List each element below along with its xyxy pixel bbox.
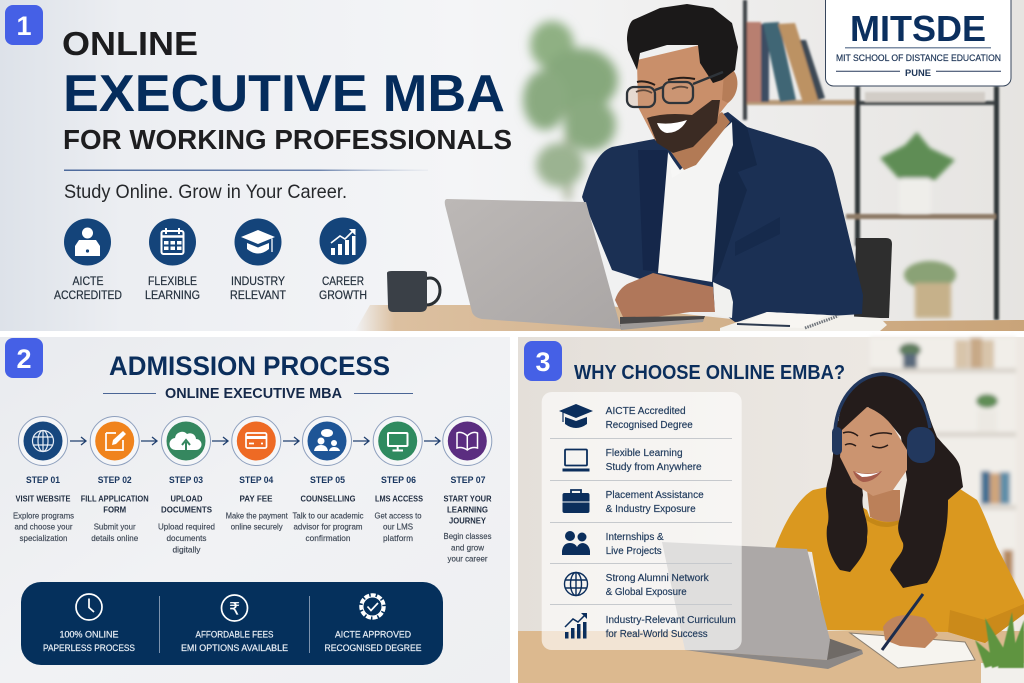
step 05: advisor for program — [294, 522, 363, 532]
face — [637, 45, 737, 153]
step 03: digitally — [172, 544, 201, 554]
step 05 — [292, 416, 364, 543]
step 06: Get access to — [374, 510, 422, 520]
feature: flexible learning: LEARNING — [145, 290, 200, 302]
step 02: STEP 02 — [98, 475, 132, 486]
benefit: accredited degree — [559, 404, 693, 431]
step 03: DOCUMENTS — [161, 504, 212, 514]
logo card — [826, 0, 1011, 86]
logo location: PUNE — [905, 68, 931, 79]
step 01: STEP 01 — [26, 475, 61, 486]
desk — [355, 305, 1024, 331]
tagline: Study Online. Grow in Your Career. — [64, 181, 347, 203]
benefit: flexible learning — [562, 448, 702, 473]
highlights bar — [21, 582, 443, 665]
chair — [854, 238, 892, 318]
hair — [627, 4, 738, 83]
benefit: curriculum — [565, 613, 736, 640]
benefit: internships — [562, 531, 664, 557]
panel: admission process — [0, 337, 510, 683]
step 07: JOURNEY — [449, 516, 486, 526]
benefit: curriculum: Industry-Relevant Curriculum — [606, 615, 736, 626]
feature: flexible learning: FLEXIBLE — [148, 276, 197, 288]
panel: why choose online emba — [518, 337, 1024, 683]
shirt — [658, 122, 733, 282]
benefit: curriculum: for Real-World Success — [606, 629, 708, 640]
step 04 — [226, 416, 288, 532]
logo wordmark: MITSDE — [850, 8, 986, 49]
benefit: alumni network: Strong Alumni Network — [606, 573, 709, 584]
step 07: Begin classes — [444, 531, 492, 541]
step 07: START YOUR — [444, 493, 492, 503]
feature: AICTE accredited — [54, 218, 122, 302]
hand — [615, 273, 715, 317]
step 01: and choose your — [14, 522, 73, 532]
shelf plants — [880, 132, 956, 318]
feature: industry relevant: RELEVANT — [230, 290, 286, 302]
left hair — [826, 420, 868, 572]
benefit: accredited degree: AICTE Accredited — [606, 406, 686, 417]
right hair — [885, 378, 963, 588]
feature: career growth — [319, 218, 367, 302]
benefit: placement assistance — [562, 490, 704, 515]
benefit: accredited degree: Recognised Degree — [606, 420, 693, 431]
step 07: LEARNING — [447, 504, 488, 514]
blurred plant — [523, 21, 618, 200]
step 02: details online — [91, 533, 139, 543]
step 03: STEP 03 — [169, 475, 203, 486]
step 03 — [158, 416, 215, 554]
beard — [647, 100, 720, 153]
step 01: VISIT WEBSITE — [16, 493, 71, 503]
badge: number 3 — [524, 341, 562, 381]
feature: career growth: CAREER — [322, 276, 364, 288]
step 07: your career — [448, 554, 488, 564]
title: online: ONLINE — [62, 25, 198, 62]
feature: career growth: GROWTH — [319, 290, 367, 302]
step 05: STEP 05 — [310, 475, 346, 486]
highlight: affordable fees — [181, 595, 288, 653]
highlight: aicte approved: RECOGNISED DEGREE — [324, 643, 422, 653]
feature: industry relevant — [230, 218, 286, 302]
benefit: internships: Live Projects — [606, 546, 662, 557]
jacket — [582, 112, 863, 322]
step 05: Talk to our academic — [292, 510, 364, 520]
title: executive mba: EXECUTIVE MBA — [63, 65, 505, 123]
highlight: 100% online: 100% ONLINE — [60, 630, 118, 640]
laptop — [445, 199, 705, 330]
step 07: and grow — [451, 542, 485, 552]
badge: number 3: 3 — [535, 347, 551, 377]
step 04: PAY FEE — [240, 493, 273, 503]
step 06: our LMS — [383, 522, 413, 532]
highlight: affordable fees: EMI OPTIONS AVAILABLE — [181, 643, 288, 653]
headphone band — [835, 374, 930, 430]
feature: industry relevant: INDUSTRY — [231, 276, 285, 288]
logo subtitle: MIT SCHOOL OF DISTANCE EDUCATION — [836, 53, 1001, 64]
office shelves background — [743, 0, 999, 320]
step 05: COUNSELLING — [300, 493, 356, 503]
step 01: specialization — [20, 533, 68, 543]
step 04: STEP 04 — [239, 475, 274, 486]
step 04: online securely — [231, 522, 284, 532]
step 07: STEP 07 — [450, 475, 486, 486]
process arrows — [70, 437, 440, 445]
highlight: 100% online: PAPERLESS PROCESS — [43, 643, 135, 653]
smile — [657, 120, 687, 133]
benefit: internships: Internships & — [606, 532, 664, 543]
highlight: 100% online — [43, 594, 135, 653]
cuff — [713, 282, 733, 318]
sweater — [775, 487, 1024, 643]
panel: hero banner — [0, 0, 1024, 331]
eyebrows — [637, 78, 695, 85]
step 02: FORM — [103, 504, 126, 514]
highlight: affordable fees: ₹ — [229, 600, 240, 620]
crown hair — [838, 375, 926, 450]
step 06: STEP 06 — [381, 475, 416, 486]
eyes — [636, 87, 688, 93]
heading: admission process: ADMISSION PROCESS — [109, 351, 390, 381]
earcups — [907, 427, 935, 463]
benefit: alumni network: & Global Exposure — [606, 587, 687, 598]
benefit: flexible learning: Flexible Learning — [606, 448, 683, 459]
highlight: aicte approved — [324, 595, 422, 653]
smile — [853, 471, 882, 482]
step 01 — [13, 416, 74, 543]
person with headphones — [775, 374, 1024, 643]
step 07 — [443, 416, 492, 564]
step 02: FILL APPLICATION — [81, 493, 149, 503]
benefit: placement assistance: & Industry Exposure — [606, 504, 696, 515]
benefit: flexible learning: Study from Anywhere — [606, 462, 702, 473]
coffee mug — [387, 271, 440, 312]
notebook and hand — [850, 594, 975, 668]
step 06: platform — [383, 533, 413, 543]
highlight: aicte approved: AICTE APPROVED — [335, 630, 411, 640]
step 03: UPLOAD — [170, 493, 203, 503]
step 03: documents — [166, 533, 206, 543]
glasses — [627, 72, 723, 107]
eyes and brows — [843, 432, 892, 448]
highlight: affordable fees: AFFORDABLE FEES — [196, 630, 274, 640]
feature: AICTE accredited: ACCREDITED — [54, 290, 122, 302]
step 02: Submit your — [94, 522, 136, 532]
badge: number 1 — [5, 5, 43, 45]
neck — [867, 490, 900, 522]
step 06 — [373, 416, 423, 543]
person in suit — [582, 4, 863, 322]
face — [840, 407, 907, 496]
neck — [666, 112, 730, 170]
step 02 — [81, 416, 149, 543]
feature: AICTE accredited: AICTE — [72, 276, 104, 288]
feature: flexible learning — [145, 218, 200, 302]
step 03: Upload required — [158, 522, 215, 532]
step 05: confirmation — [306, 533, 351, 543]
benefit: alumni network — [564, 572, 709, 598]
badge: number 2: 2 — [16, 344, 32, 374]
badge: number 2 — [5, 338, 43, 378]
badge: number 1: 1 — [16, 11, 32, 41]
room shelves background — [870, 337, 1016, 637]
benefits card — [542, 392, 742, 650]
laptop — [662, 542, 863, 669]
potted plant — [975, 612, 1024, 683]
step 04: Make the payment — [226, 510, 288, 520]
desk — [518, 631, 1024, 683]
benefit: placement assistance: Placement Assistance — [606, 490, 704, 501]
notebook — [720, 312, 887, 331]
subheading: online executive mba: ONLINE EXECUTIVE MBA — [165, 385, 342, 402]
heading: why choose online emba: WHY CHOOSE ONLINE EMBA? — [574, 361, 845, 384]
step 01: Explore programs — [13, 510, 74, 520]
step 06: LMS ACCESS — [375, 493, 423, 503]
title: for working professionals: FOR WORKING PROFESSIONALS — [63, 124, 512, 155]
